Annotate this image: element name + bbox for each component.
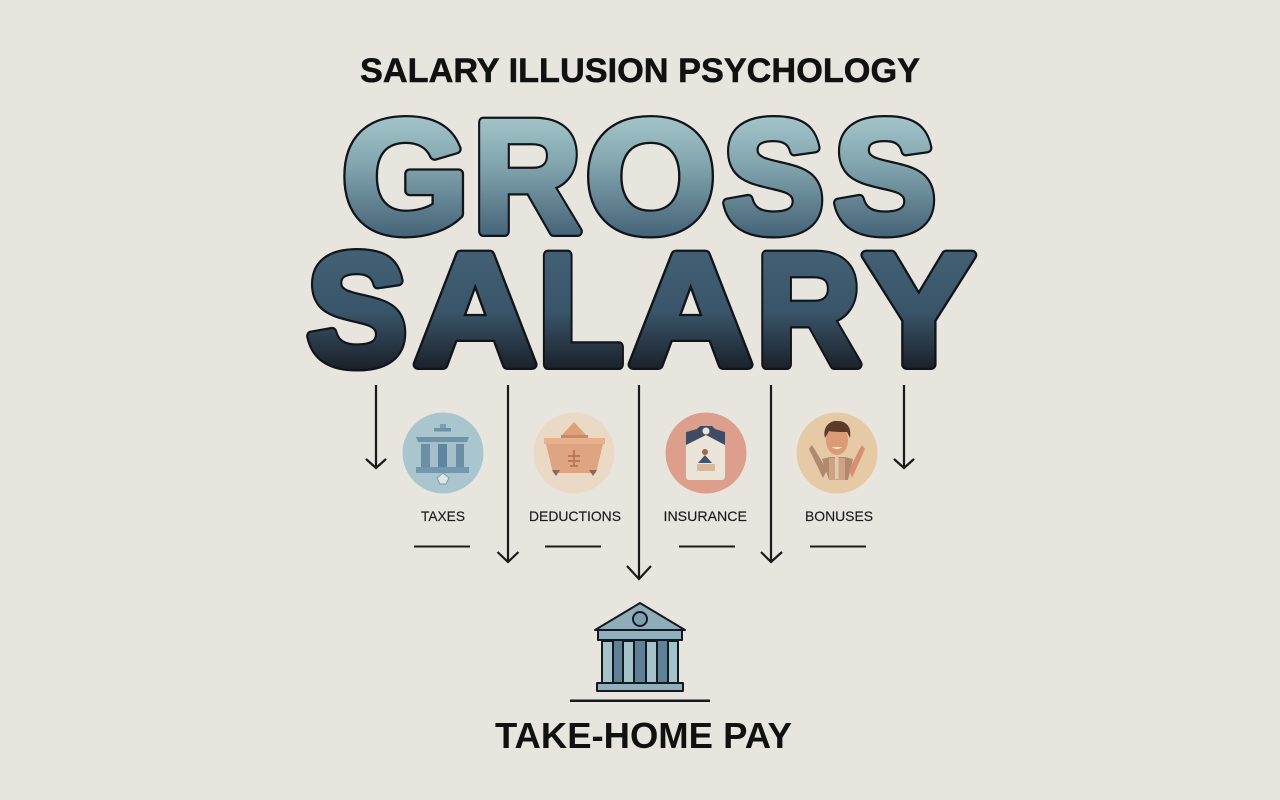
line under taxes [414, 546, 470, 548]
arrow 1 [366, 385, 386, 468]
heading: gross salary: G [342, 88, 469, 266]
title: SALARY ILLUSION PSYCHOLOGY [360, 52, 920, 90]
heading: gross salary: A [414, 220, 536, 398]
heading: gross salary: R [757, 220, 861, 398]
icon: insurance [666, 412, 746, 494]
arrow 3 [627, 385, 651, 579]
icon: taxes [402, 412, 484, 494]
heading: gross salary: Y [863, 220, 974, 398]
icon: deductions [534, 412, 614, 494]
heading: gross salary: R [757, 220, 861, 398]
arrow 4 [761, 385, 782, 562]
heading: gross salary: L [538, 220, 623, 398]
heading: gross salary: A [414, 220, 536, 398]
icon: bank [570, 603, 710, 702]
heading: gross salary: S [307, 220, 407, 398]
label: insurance: INSURANCE [664, 508, 747, 524]
heading: gross salary: S [834, 88, 936, 266]
heading: gross salary: A [629, 220, 752, 398]
heading: gross salary: L [538, 220, 623, 398]
heading: gross salary: S [723, 88, 824, 266]
line under deductions [545, 546, 601, 548]
label: deductions: DEDUCTIONS [529, 508, 621, 524]
heading: gross salary [307, 88, 974, 398]
heading: gross salary: S [834, 88, 936, 266]
heading: gross salary: A [629, 220, 752, 398]
label: taxes: TAXES [421, 508, 465, 524]
heading: gross salary: O [586, 88, 715, 266]
heading: gross salary: O [586, 88, 715, 266]
label: bonuses: BONUSES [805, 508, 873, 524]
line under insurance [679, 546, 735, 548]
heading: gross salary: Y [863, 220, 974, 398]
heading: gross salary: G [342, 88, 469, 266]
icon: bonuses [796, 412, 878, 494]
line under bonuses [810, 546, 866, 548]
label: take-home pay: TAKE-HOME PAY [495, 715, 792, 756]
arrow 2 [498, 385, 518, 562]
heading: gross salary: S [307, 220, 407, 398]
heading: gross salary: S [723, 88, 824, 266]
heading: gross salary: R [473, 88, 581, 266]
arrow 5 [894, 385, 914, 468]
heading: gross salary: R [473, 88, 581, 266]
